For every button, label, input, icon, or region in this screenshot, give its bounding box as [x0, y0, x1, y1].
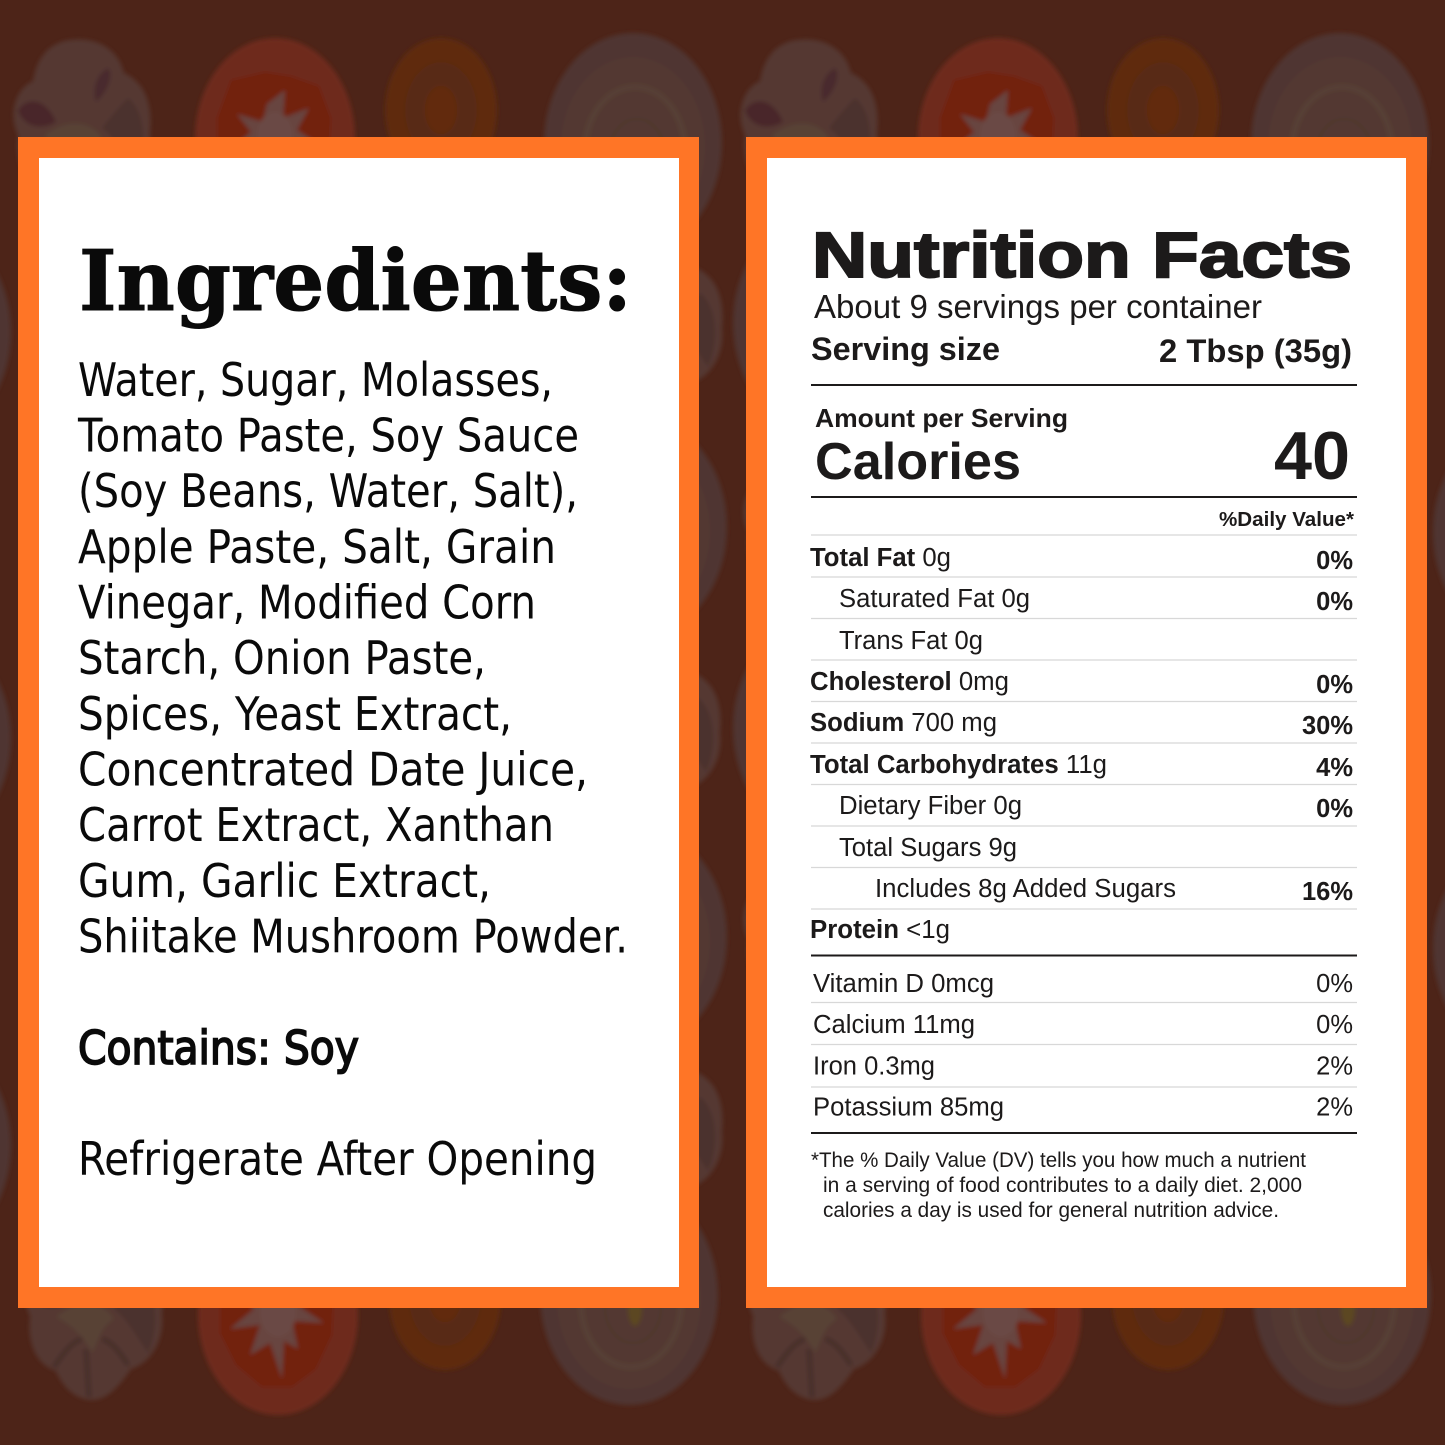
icon: tomato bottom right	[921, 1215, 1081, 1415]
icon: carrot top left	[385, 38, 497, 182]
icon: garlic gap 3	[585, 1038, 723, 1218]
footnote: calories a day is used for general nutrition advice.	[823, 1199, 1279, 1222]
panel: nutrition facts	[746, 137, 1427, 1308]
vitamins and minerals table: Calcium 11mg	[813, 1011, 975, 1039]
serving info: 2 Tbsp (35g)	[1159, 333, 1352, 369]
vitamins and minerals table: Vitamin D 0mcg	[813, 970, 994, 998]
icon: carrot top right	[1107, 38, 1219, 182]
heading: Nutrition Facts: Nutrition Facts	[812, 219, 1352, 291]
icon: onion right edge 1	[1433, 422, 1445, 642]
icon: onion left edge 3	[0, 1035, 11, 1255]
vitamins and minerals table: 2%	[1316, 1052, 1353, 1080]
text block: ingredient list: Vinegar, Modified Corn	[78, 576, 536, 630]
icon: onion right edge 2	[1433, 838, 1445, 1058]
icon: garlic bottom right	[748, 1220, 886, 1400]
serving info: Serving size	[811, 331, 1000, 367]
nutrient table: Sodium 700 mg	[810, 709, 997, 737]
calories block: Calories	[815, 433, 1021, 491]
calories block: %Daily Value*	[1219, 509, 1354, 531]
nutrient table: 16%	[1302, 878, 1353, 906]
calories block: Amount per Serving	[815, 403, 1068, 433]
nutrient table: 0%	[1316, 588, 1353, 616]
text block: ingredient list: (Soy Beans, Water, Salt),	[78, 464, 578, 518]
icon: tomato top left	[195, 38, 355, 238]
icon: garlic gap right 2	[743, 843, 881, 1023]
icon: tomato bottom left	[198, 1215, 358, 1415]
text block: ingredient list: Spices, Yeast Extract,	[78, 687, 512, 741]
icon: garlic gap right 1	[743, 436, 881, 616]
vitamins and minerals table: Iron 0.3mg	[813, 1052, 935, 1080]
icon: carrot bottom left	[389, 1226, 501, 1370]
text block: ingredient list: Apple Paste, Salt, Grain	[78, 520, 556, 574]
text block: ingredient list: Starch, Onion Paste,	[78, 631, 486, 685]
vitamins and minerals table: 0%	[1316, 970, 1353, 998]
icon: garlic top left	[13, 39, 151, 219]
text block: ingredient list: Tomato Paste, Soy Sauce	[77, 408, 579, 462]
panel: ingredients	[18, 137, 699, 1308]
nutrient table: Dietary Fiber 0g	[839, 792, 1022, 820]
text: storage: Refrigerate After Opening	[78, 1132, 597, 1186]
icon: onion gap right 2	[733, 618, 911, 838]
nutrient table: Trans Fat 0g	[839, 627, 983, 655]
icon: garlic gap 2	[583, 639, 721, 819]
icon: garlic top right	[740, 39, 878, 219]
vitamins and minerals table: Potassium 85mg	[813, 1094, 1004, 1122]
serving info: About 9 servings per container	[814, 288, 1262, 325]
icon: onion left edge 2	[0, 628, 11, 848]
text block: ingredient list	[77, 353, 628, 964]
nutrient table: Total Fat 0g	[810, 544, 951, 572]
heading: Ingredients: Ingredients:	[79, 232, 632, 330]
vitamins and minerals table	[813, 970, 1353, 1122]
serving info	[811, 288, 1352, 369]
nutrient table: Total Sugars 9g	[839, 834, 1017, 862]
nutrient table: 4%	[1316, 754, 1353, 782]
text: allergen: Contains: Soy	[78, 1021, 359, 1075]
calories block: 40	[1274, 418, 1350, 494]
nutrient table: 0%	[1316, 671, 1353, 699]
footnote	[811, 1149, 1306, 1222]
nutrient table: 0%	[1316, 795, 1353, 823]
footnote: in a serving of food contributes to a daily diet. 2,000	[823, 1174, 1302, 1197]
text block: ingredient list: Concentrated Date Juice,	[78, 742, 588, 796]
nutrient table: 0%	[1316, 547, 1353, 575]
calories block	[815, 403, 1354, 531]
nutrient table: Protein <1g	[810, 916, 950, 944]
icon: carrot bottom right	[1112, 1226, 1224, 1370]
icon: tomato top right	[918, 38, 1078, 238]
icon: onion top left	[544, 33, 722, 253]
footnote: *The % Daily Value (DV) tells you how much a nutrient	[811, 1149, 1306, 1172]
vitamins and minerals table: 2%	[1316, 1094, 1353, 1122]
icon: garlic gap 1	[585, 234, 723, 414]
nutrient table: Total Carbohydrates 11g	[810, 751, 1107, 779]
icon: onion bottom left	[540, 1185, 718, 1405]
icon: onion top right	[1251, 33, 1429, 253]
nutrient table	[810, 544, 1353, 944]
icon: onion gap 2	[549, 827, 727, 1047]
icon: onion left edge 1	[0, 222, 11, 442]
nutrient table: Includes 8g Added Sugars	[875, 875, 1176, 903]
nutrient table: 30%	[1302, 712, 1353, 740]
text block: ingredient list: Gum, Garlic Extract,	[78, 854, 491, 908]
text block: ingredient list: Water, Sugar, Molasses,	[78, 353, 553, 407]
icon: onion bottom right	[1253, 1185, 1431, 1405]
text block: ingredient list: Shiitake Mushroom Powder.	[78, 910, 628, 964]
vitamins and minerals table: 0%	[1316, 1011, 1353, 1039]
icon: onion gap right 1	[733, 213, 911, 433]
nutrient table: Cholesterol 0mg	[810, 668, 1009, 696]
icon: onion gap 1	[549, 417, 727, 637]
text block: ingredient list: Carrot Extract, Xanthan	[78, 798, 554, 852]
nutrient table: Saturated Fat 0g	[839, 585, 1030, 613]
icon: garlic bottom left	[25, 1220, 163, 1400]
